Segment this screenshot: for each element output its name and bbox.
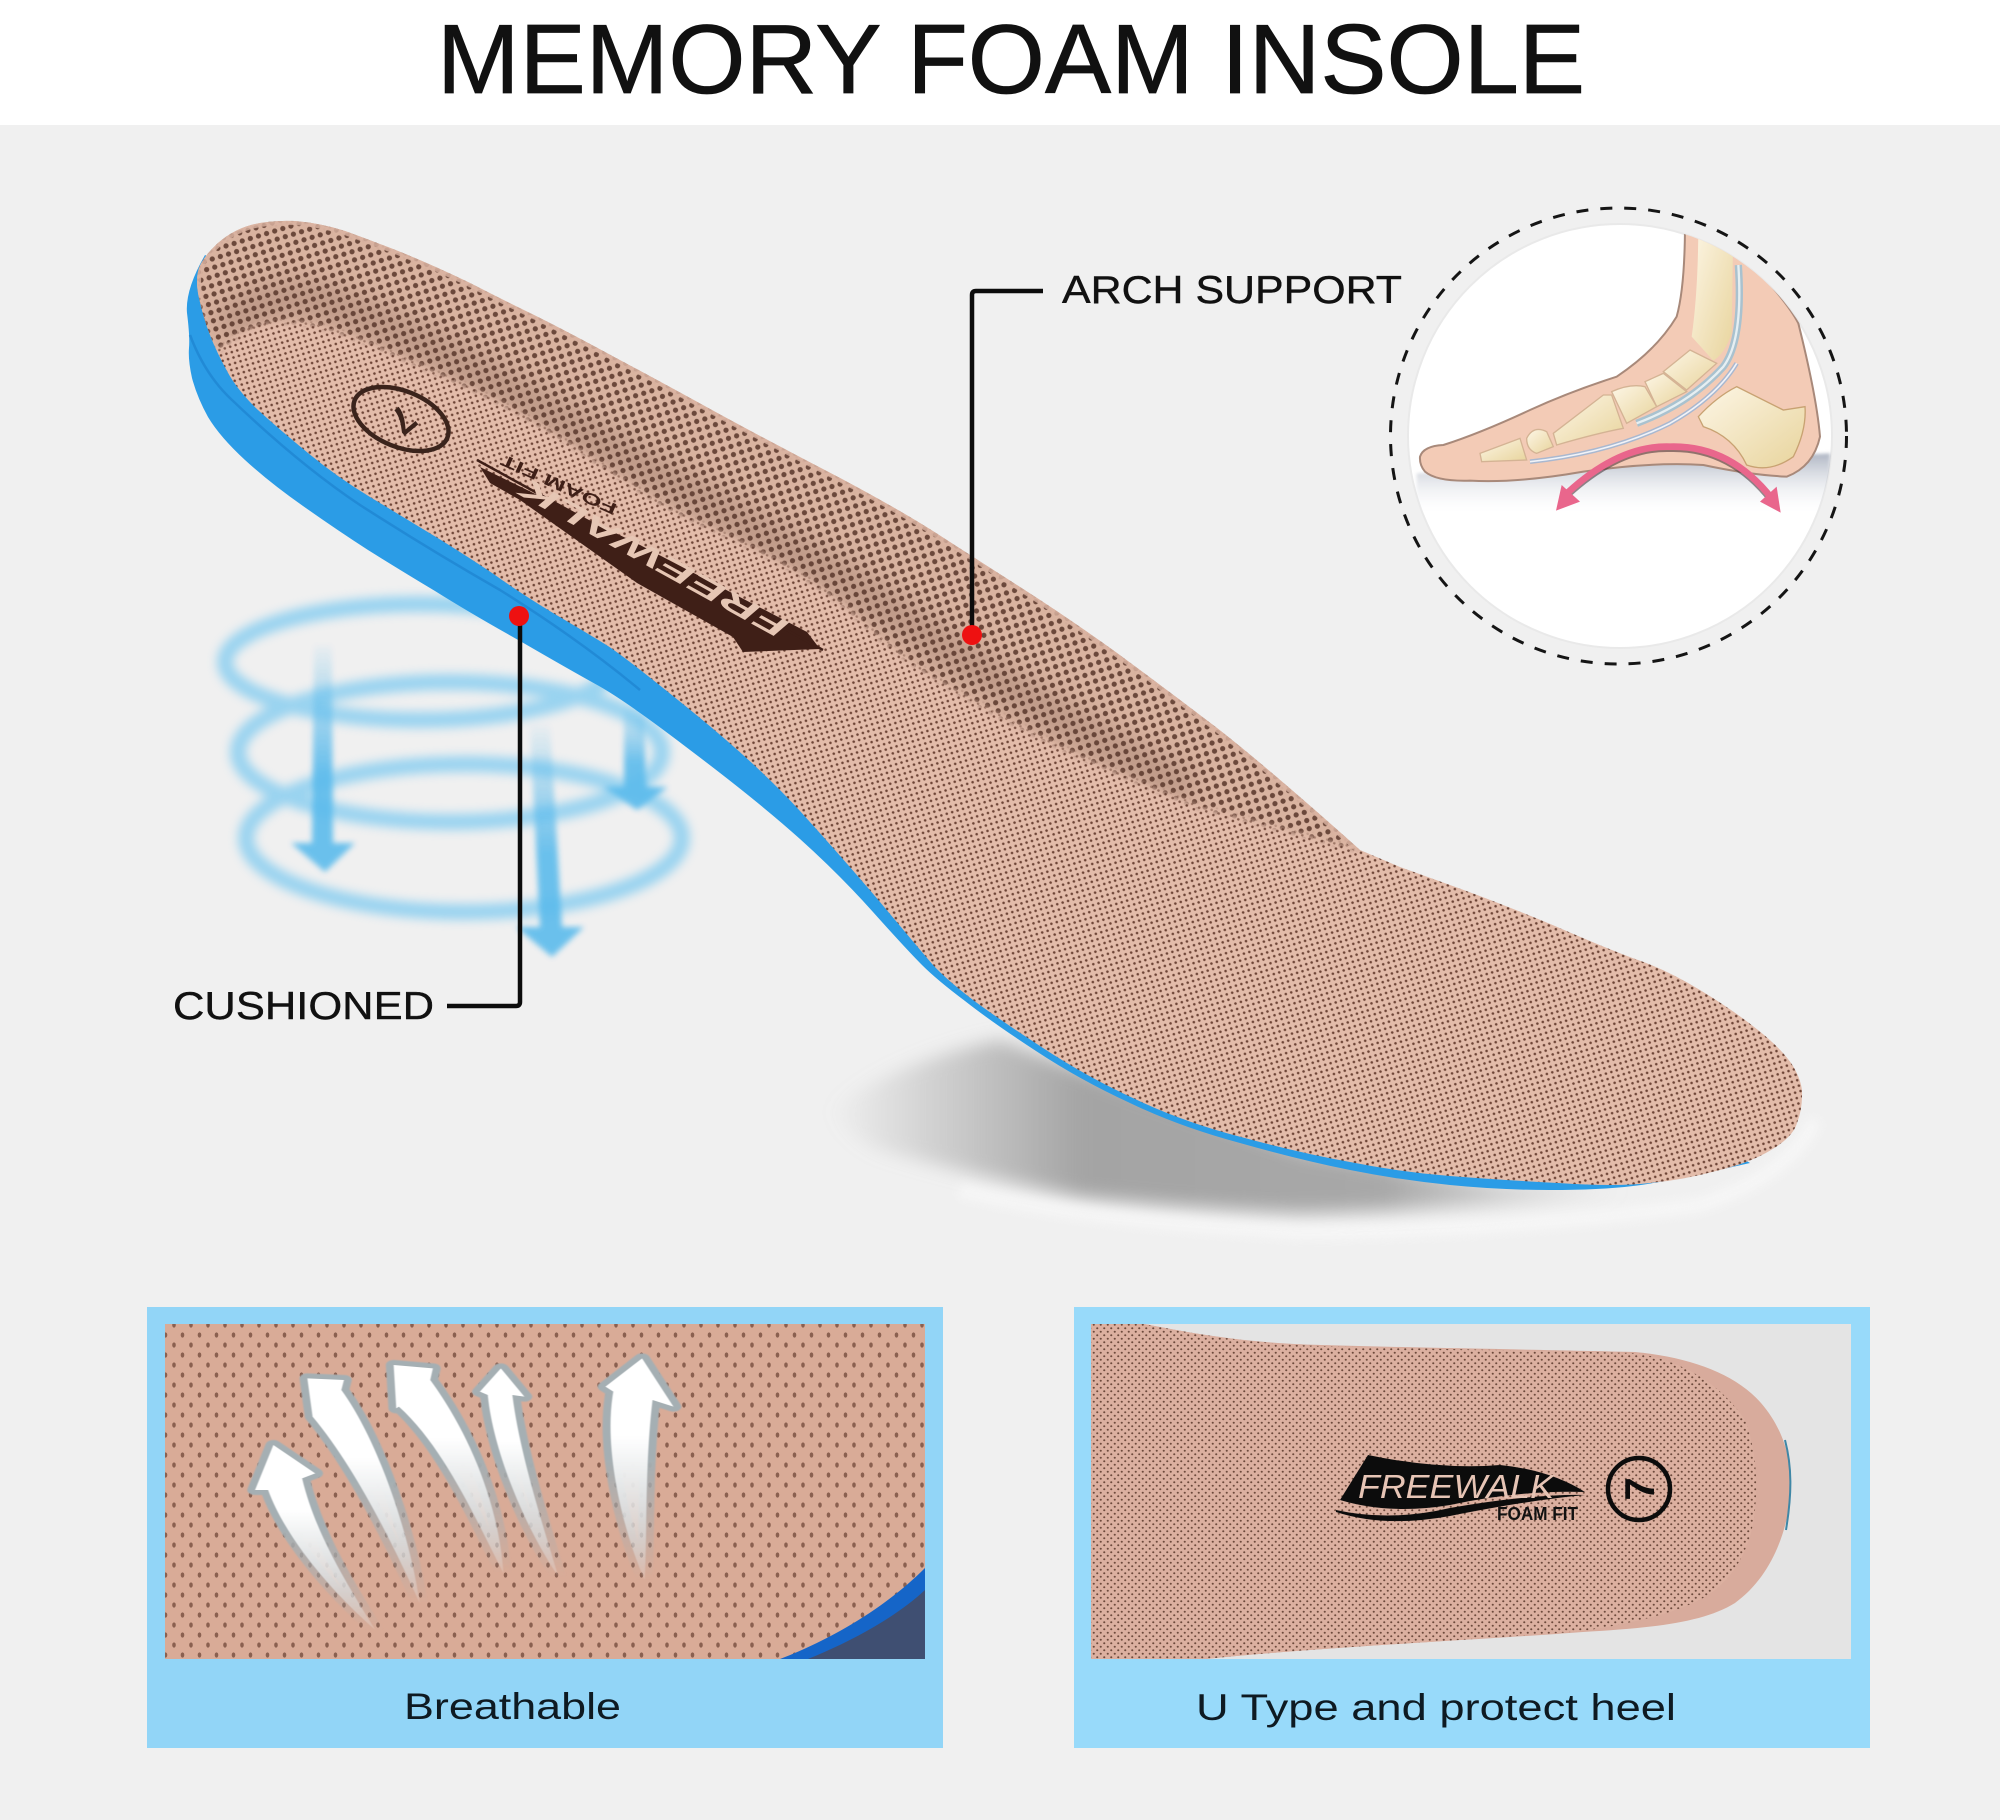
logo underline (1336, 1495, 1585, 1521)
pink arch arrow (1571, 450, 1766, 498)
freewalk logo text: FREEWALK (1358, 1468, 1556, 1505)
foot arch illustration circle (1390, 208, 1846, 664)
insole shadow (830, 1040, 1815, 1232)
size mark: 7 (381, 396, 424, 442)
title: MEMORY FOAM INSOLE (437, 4, 1585, 114)
dark corner (808, 1590, 925, 1659)
fabric close-up (165, 1324, 925, 1659)
breathing arrows (255, 1358, 673, 1630)
heel caption: U Type and protect heel (1196, 1687, 1676, 1728)
arch and heel-cup textured wall (180, 200, 1380, 880)
arrows pointing down (291, 645, 668, 957)
foot skin (1420, 223, 1820, 481)
foot anatomy (1417, 223, 1830, 517)
cushioned leader line (447, 616, 520, 1006)
heel bone (1698, 387, 1805, 468)
blue edge corner (780, 1568, 925, 1659)
panel: breathable (147, 1307, 943, 1748)
cushioned marker (509, 606, 529, 626)
white disc (1408, 224, 1832, 648)
white glow under insole (960, 1120, 1815, 1232)
heel smooth rim (1091, 1324, 1791, 1659)
foam fit text: FOAM FIT (1497, 1504, 1578, 1524)
grey backdrop (1091, 1324, 1851, 1659)
insole blue foam base (187, 255, 1750, 1190)
midfoot bones (1663, 350, 1717, 390)
heel textured area (1091, 1324, 1756, 1659)
brand logo: FREEWALK (513, 471, 793, 645)
callout: cushioned (173, 606, 529, 1028)
tendons (1637, 265, 1739, 423)
cushioning rings and arrows (225, 604, 682, 957)
arch support marker (962, 625, 982, 645)
panel frame (1074, 1307, 1870, 1748)
heel close-up (1091, 1324, 1791, 1659)
shin bone (1692, 239, 1733, 360)
brand logo: FOAM FIT (498, 450, 620, 517)
insole tan top surface (197, 221, 1802, 1185)
heel teal edge (1785, 1440, 1790, 1530)
title band (0, 0, 2000, 125)
main insole (180, 200, 1802, 1190)
halo strokes (255, 1358, 673, 1630)
callout: arch support (962, 269, 1402, 645)
panel: u type heel (1074, 1307, 1870, 1748)
panel frame (147, 1307, 943, 1748)
dashed ring (1390, 208, 1846, 664)
arch support leader line (972, 291, 1043, 635)
size mark (1608, 1458, 1670, 1520)
logo swoosh (1340, 1455, 1585, 1509)
breathable caption: Breathable (404, 1686, 621, 1727)
arch support label: ARCH SUPPORT (1062, 269, 1402, 312)
size mark (344, 374, 458, 464)
white arrows (255, 1358, 673, 1630)
foam seam line (190, 335, 640, 690)
size mark: 7 (1616, 1477, 1663, 1501)
floor shadow (1416, 452, 1831, 496)
brand logo (477, 450, 823, 652)
cushioned label: CUSHIONED (173, 985, 434, 1028)
